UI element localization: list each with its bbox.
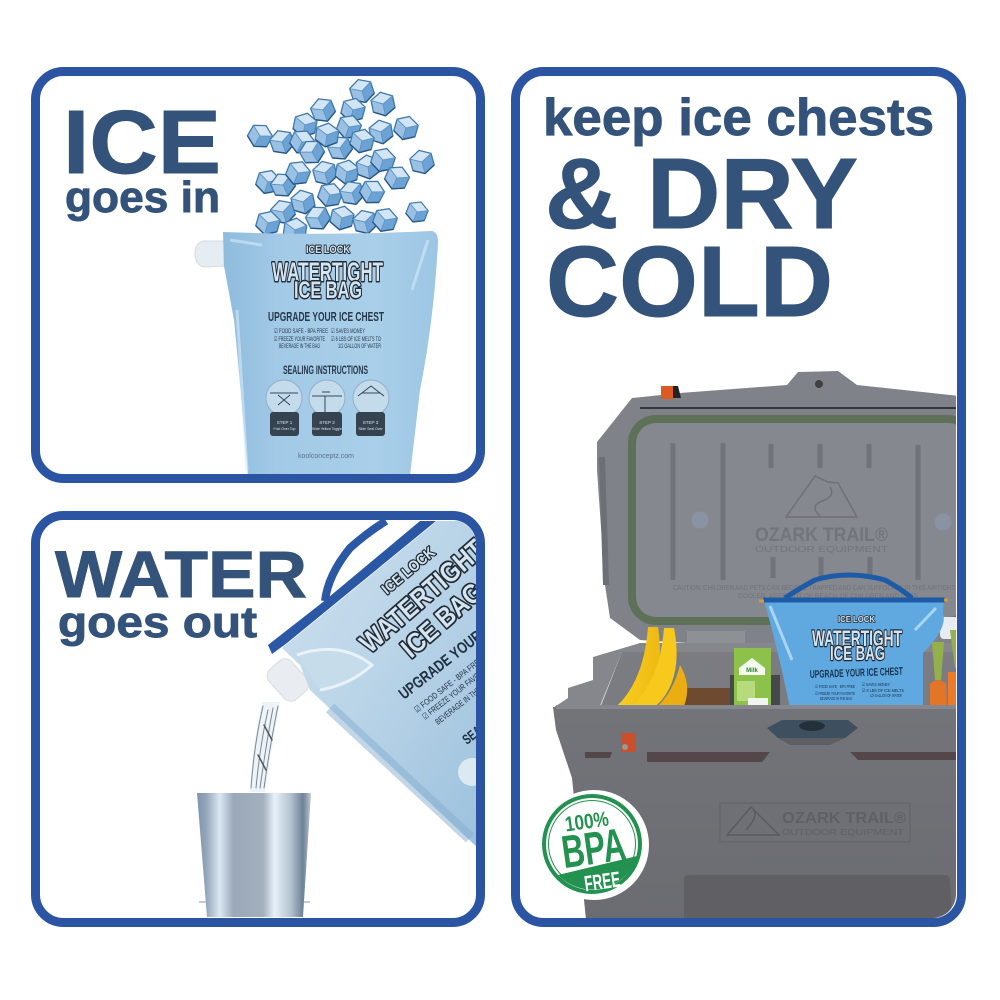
bag text [268,309,384,377]
badge: 100% BPA free: 100% [564,808,611,836]
bag text: ☑ FREEZE YOUR FAVORITE [274,336,325,343]
sealing step 3: STEP 3 [363,420,379,425]
panel: ice goes in [36,72,480,478]
orange pin [621,733,636,752]
logo plate [720,803,910,842]
bag spout [195,241,224,267]
heading: and dry: & DRY [545,138,858,250]
bag label: ☑ FREEZE YOUR FAVORITE [420,661,493,722]
bag logo: ICE BAG [294,277,362,304]
milk box: Milk [746,668,758,674]
sealing step 2: STEP 2 [319,420,335,425]
sealing step 1: Fold Over Top [274,427,296,431]
badge: 100% BPA free: BPA [558,818,629,878]
bag label: UPGRADE YOUR ICE CHEST [810,666,903,681]
heading: cold: COLD [546,226,833,338]
bag text: UPGRADE YOUR ICE CHEST [268,309,384,324]
bag text: SEALING INSTRUCTIONS [283,363,368,377]
cooler rim and interior [553,631,960,708]
heading: ICE: ICE [63,93,221,193]
lid logo [673,476,956,600]
bag label: ICE BAG [830,643,885,665]
drinking cup [197,793,311,917]
heading: goes out: goes out [58,598,257,647]
bag label: ☑ SAVES MONEY [862,682,890,687]
bag spout [266,658,309,702]
milk box [734,648,771,707]
panel: water goes out [31,511,485,927]
bag label: ☑ FOOD SAFE - BPA FREE [412,654,485,715]
lid logo: COOLER. KEEP OUT OF REACH OF CHILDREN AND PETS [738,593,919,600]
icon: falling ice cubes [244,76,436,243]
sealing step 1: STEP 1 [277,420,293,425]
bag body [223,231,438,476]
lid logo: OUTDOOR EQUIPMENT [755,545,888,554]
badge: 100% BPA free: FREE [583,867,622,896]
logo plate: OZARK TRAIL® [782,810,906,827]
lid logo: CAUTION: CHILDREN AND PETS CAN BECOME TRAPPED AND CAN SUFFOCATE IN THIS AIRTIGHT [673,585,956,592]
bag label: UPGRADE YOUR ICE CHEST [396,585,541,703]
illustration: cooler [553,371,972,920]
bag label: SEALING INSTRUCTIONS [459,661,563,747]
bag label: ☑ FREEZE YOUR FAVORITE [815,691,855,696]
sealing step 3: Slide Seal Over [358,427,383,431]
lower recess [684,875,952,920]
badge: 100% BPA free [539,790,649,900]
sealing step 1 [266,380,302,436]
latch [767,720,858,738]
bag label: ICE LOCK [838,615,875,624]
bag label: BEVERAGE IN THE BAG [433,676,494,727]
ice bag in cooler [759,575,948,708]
bag text: ☑ SAVES MONEY [331,328,365,335]
logo plate: OUTDOOR EQUIPMENT [782,828,904,837]
carrots [930,617,956,705]
bag label: WATERTIGHT [812,626,902,651]
water stream [250,702,280,792]
website: koolconceptz.com [298,453,354,460]
bag label: ☑ FOOD SAFE - BPA FREE [815,684,855,689]
bag label: BEVERAGE IN THE BAG [820,696,852,701]
pouring bag [266,520,476,846]
sealing step 3 [353,380,389,436]
product: watertight ice bag [195,231,438,476]
bag text: 1/2 GALLON OF WATER [338,344,381,350]
bag label: 1/2 GALLON OF WATER [870,693,902,698]
heading: goes in: goes in [65,173,220,222]
bag text: ☑ 6 LBS OF ICE MELTS TO [331,336,381,343]
bag label [356,536,476,786]
heading: keep ice chests: keep ice chests [543,89,934,147]
orange lid tab [661,386,681,399]
bag body [282,521,480,850]
panel: keep ice chests dry and cold [516,72,972,922]
blue rim and handle [268,521,436,654]
bag logo [272,244,383,304]
bag logo: ICE LOCK [306,244,350,256]
bag logo: WATERTIGHT [272,257,383,287]
sealing step 2: Slide Yellow Toggle [312,427,342,431]
cooler body [553,705,960,920]
bag label [810,615,904,701]
bag label: ☑ 6 LBS OF ICE MELTS [862,688,904,693]
cooler lid [597,371,972,660]
heading: WATER: WATER [55,537,307,611]
bag handle [763,575,945,600]
bag label: ICE BAG [395,577,489,664]
bag label: WATERTIGHT [354,533,491,659]
bananas [617,627,687,706]
bag label: ICE LOCK [379,544,439,598]
bag text: BEVERAGE IN THE BAG [279,344,320,350]
sealing step 2 [309,380,345,436]
lid logo: OZARK TRAIL® [755,525,888,546]
bag text: ☑ FOOD SAFE - BPA FREE [274,328,328,335]
